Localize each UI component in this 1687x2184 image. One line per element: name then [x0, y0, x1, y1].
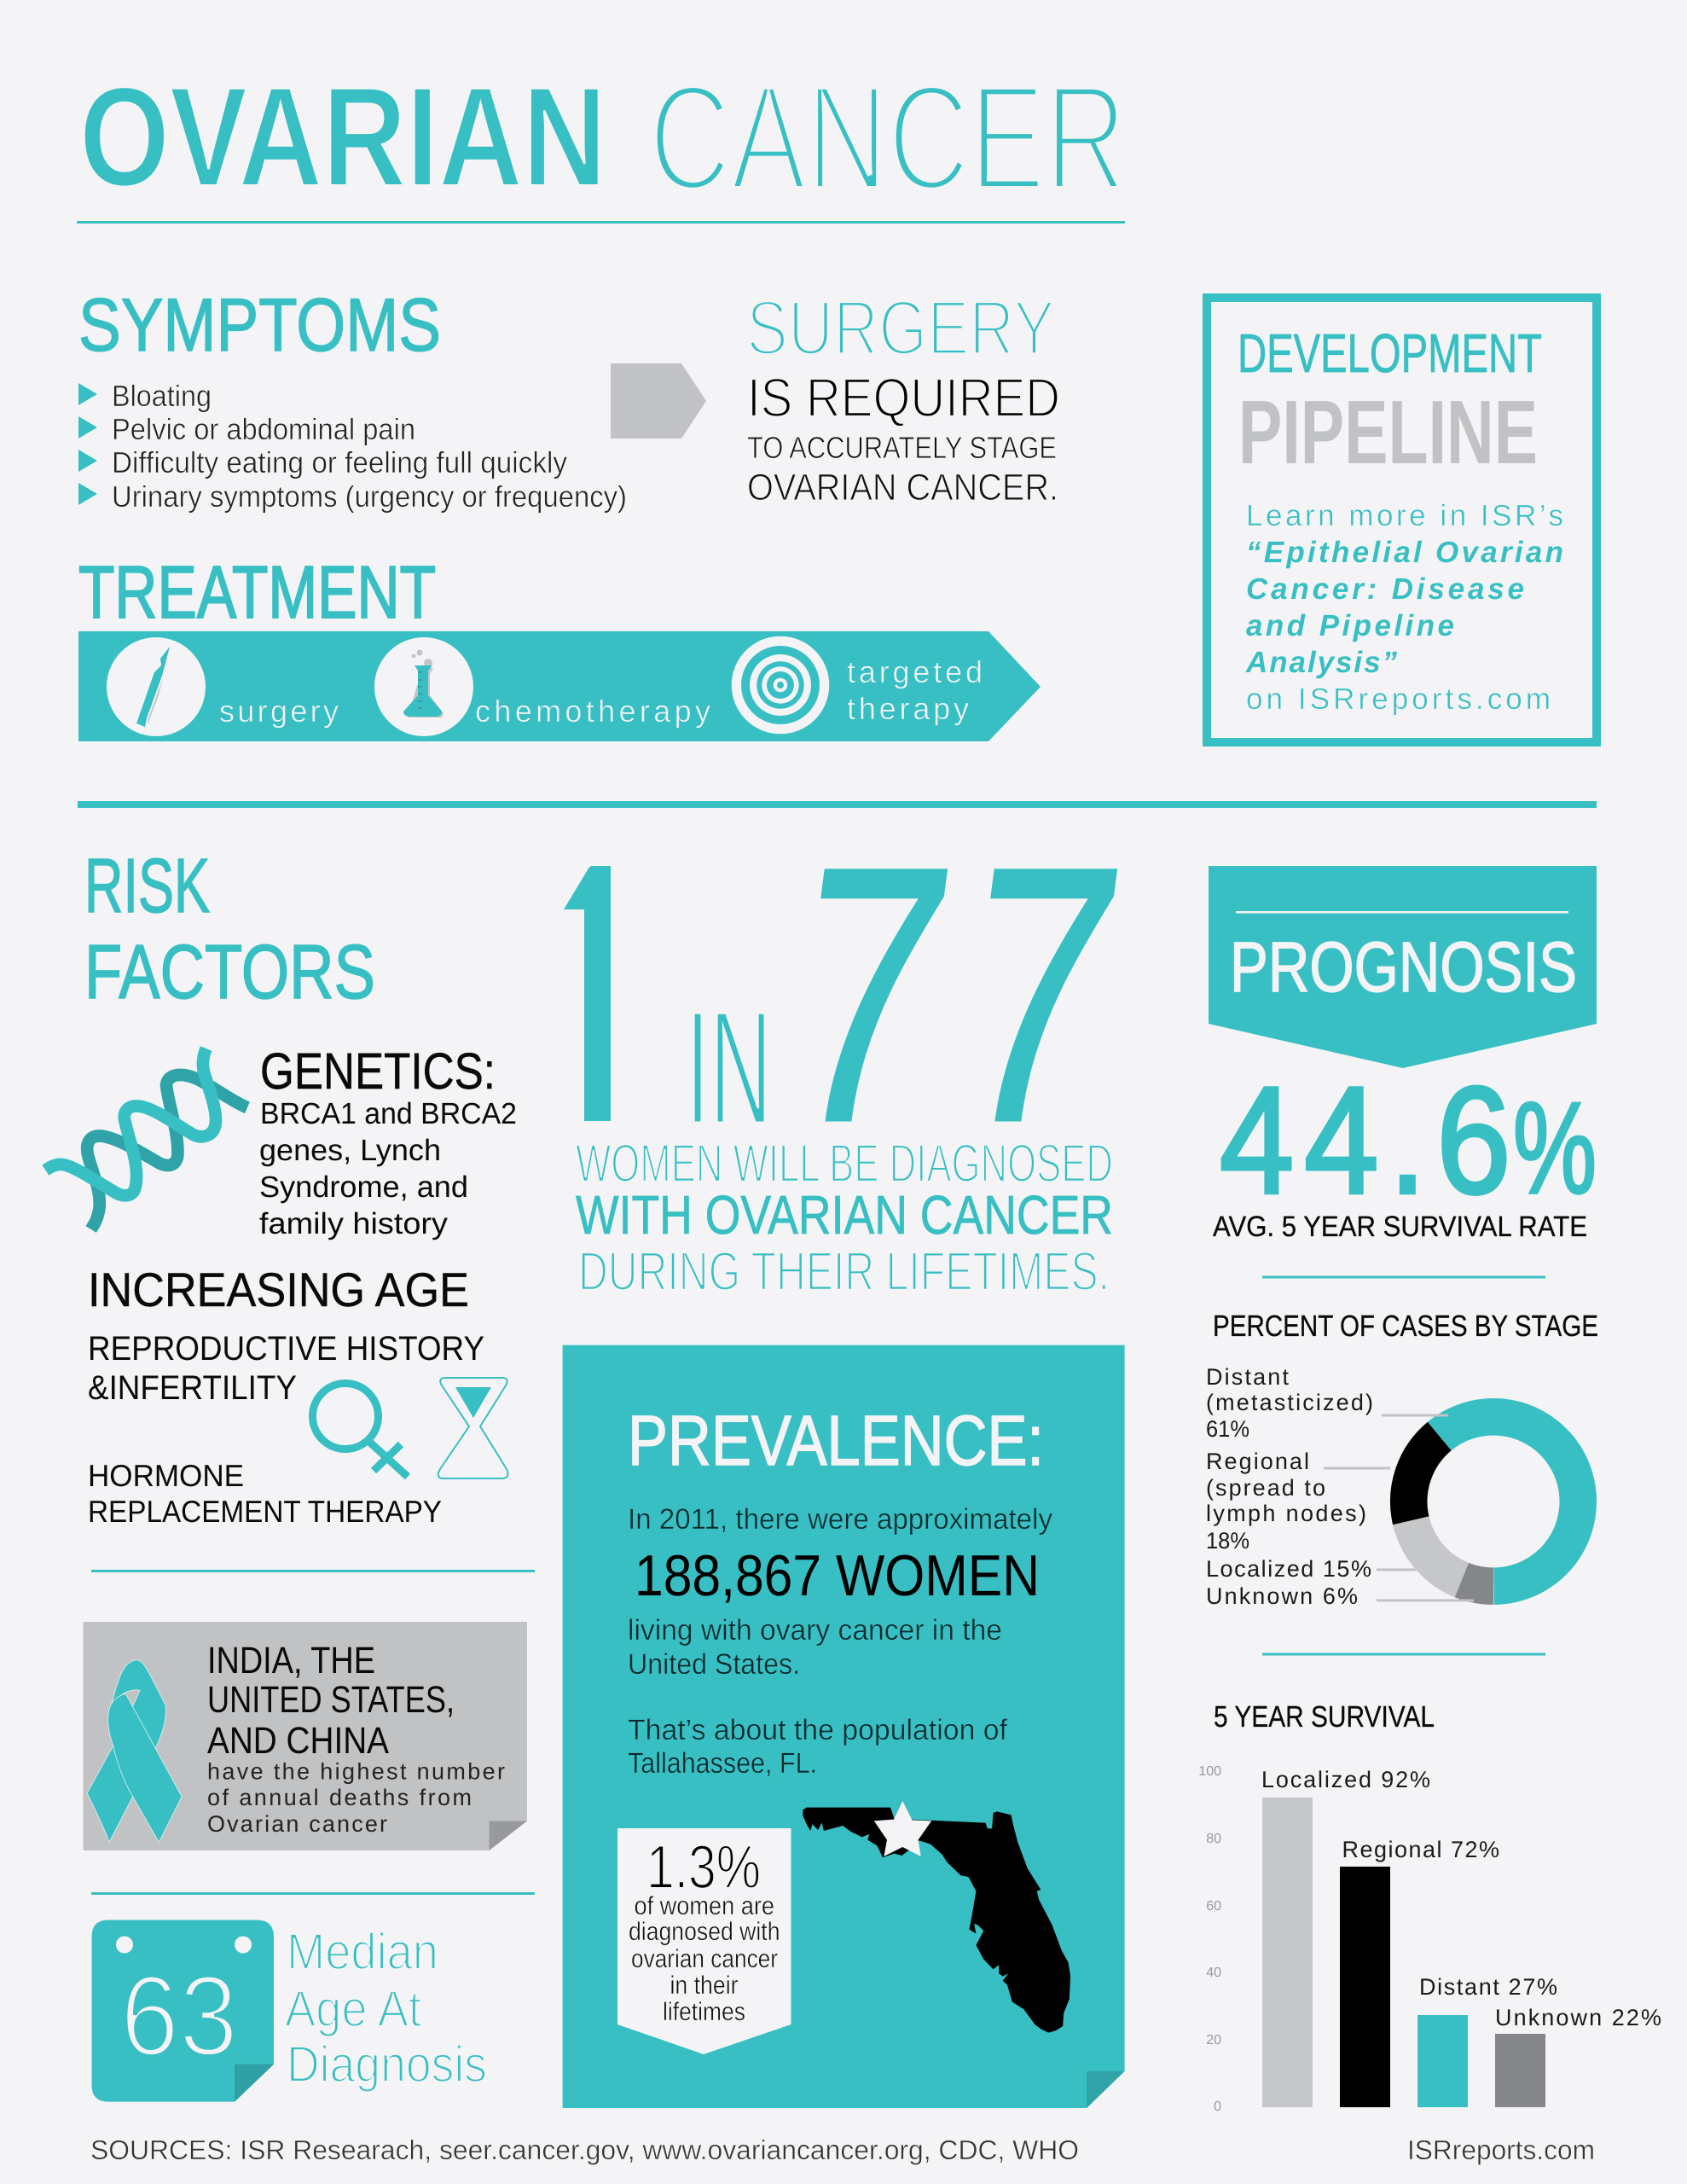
donut labels: Unknown 6% [1206, 1583, 1358, 1609]
genetics: genes, Lynch [259, 1134, 441, 1167]
big statistic: 1 in 77: 1 [511, 789, 674, 1199]
panel: treatment arrow [78, 631, 1041, 741]
statistic caption: WITH OVARIAN CANCER [576, 1184, 1113, 1246]
callout: 1.3%: in their [670, 1972, 739, 2000]
pipeline text: Learn more in ISR’s [1246, 499, 1563, 532]
heading: risk factors: RISK [84, 844, 210, 929]
prevalence body: In 2011, there were approximately [628, 1503, 1052, 1536]
treatment labels [219, 654, 983, 729]
note subtext: Ovarian cancer [207, 1811, 387, 1837]
symptoms list: Difficulty eating or feeling full quickly [112, 446, 567, 479]
y axis: 20 [1206, 2033, 1221, 2048]
statistic caption: WOMEN WILL BE DIAGNOSED [576, 1134, 1113, 1194]
donut labels: 61% [1206, 1416, 1249, 1442]
symptoms list: Urinary symptoms (urgency or frequency) [112, 480, 627, 514]
bars [1262, 1798, 1545, 2107]
donut labels: 18% [1206, 1528, 1249, 1554]
surgery callout: IS REQUIRED [747, 367, 1060, 428]
panel: prognosis banner [1209, 866, 1597, 1068]
panel: prognosis banner: PROGNOSIS [1230, 927, 1577, 1007]
donut labels: lymph nodes) [1206, 1501, 1366, 1526]
treatment labels: chemotherapy [475, 694, 710, 729]
footer sources: SOURCES: ISR Researach, seer.cancer.gov, www.ovariancancer.org, CDC, WHO [90, 2135, 1079, 2165]
icon: star [874, 1801, 931, 1856]
bar labels: Distant 27% [1419, 1974, 1557, 2000]
treatment labels: surgery [219, 694, 339, 729]
donut leader lines [1324, 1415, 1474, 1600]
genetics: Syndrome, and [259, 1170, 468, 1204]
footer site: ISRreports.com [1407, 2135, 1595, 2165]
icon: female symbol [312, 1384, 408, 1477]
bar labels: Localized 92% [1261, 1767, 1430, 1792]
arrow: grey [611, 363, 706, 439]
panel: development pipeline: DEVELOPMENT [1238, 322, 1542, 384]
fold [490, 1821, 527, 1850]
survival rate: AVG. 5 YEAR SURVIVAL RATE [1213, 1211, 1587, 1243]
prevalence body: United States. [628, 1648, 800, 1681]
surgery callout: TO ACCURATELY STAGE [747, 430, 1057, 465]
median age label [285, 1923, 487, 2093]
panel: development pipeline [1207, 298, 1597, 742]
donut chart [1374, 1382, 1613, 1621]
donut labels [1206, 1364, 1373, 1609]
icon: dna helix [45, 1048, 247, 1229]
big statistic: 1 in 77 [511, 789, 1140, 1199]
statistic caption [576, 1134, 1113, 1302]
reproductive history: REPRODUCTIVE HISTORY [88, 1330, 484, 1368]
hormone therapy: HORMONE [88, 1458, 244, 1493]
prevalence body: That’s about the population of [628, 1714, 1008, 1746]
fold [1087, 2071, 1125, 2108]
heading: risk factors [84, 844, 375, 1015]
statistic caption: DURING THEIR LIFETIMES. [578, 1240, 1110, 1302]
callout: 1.3%: ovarian cancer [631, 1945, 778, 1973]
panel: deaths note [84, 1622, 527, 1850]
y axis: 100 [1198, 1764, 1221, 1779]
median age label: Age At [285, 1980, 421, 2037]
icon: hourglass [438, 1378, 508, 1478]
bar labels [1261, 1767, 1661, 2030]
panel: prevalence [563, 1345, 1125, 2108]
genetics: GENETICS: [260, 1043, 496, 1100]
title: OVARIAN [79, 58, 606, 217]
y axis: 60 [1206, 1899, 1221, 1914]
bar labels: Regional 72% [1342, 1837, 1499, 1862]
heading: risk factors: FACTORS [84, 930, 375, 1015]
bullet icons [78, 383, 97, 505]
icon: calendar with median age [92, 1920, 274, 2102]
donut labels: (spread to [1206, 1475, 1325, 1501]
median age label: Diagnosis [287, 2036, 487, 2093]
prevalence body: Tallahassee, FL. [628, 1747, 817, 1780]
big statistic: 1 in 77: IN [686, 978, 772, 1159]
icon: calendar with median age: 63 [120, 1953, 238, 2080]
survival rate [1213, 1055, 1597, 1243]
y axis: 40 [1206, 1966, 1221, 1980]
survival rate: 44.6 [1220, 1055, 1510, 1225]
icon: ribbon [87, 1660, 182, 1842]
bar chart [1198, 1764, 1661, 2114]
surgery callout [746, 285, 1060, 508]
increasing age: INCREASING AGE [88, 1263, 469, 1316]
median age label: Median [287, 1923, 438, 1980]
donut labels: Localized 15% [1206, 1556, 1371, 1582]
prevalence heading: PREVALENCE: [628, 1401, 1044, 1480]
callout: 1.3%: of women are [635, 1892, 774, 1920]
prevalence body [628, 1503, 1052, 1780]
genetics: BRCA1 and BRCA2 [260, 1097, 517, 1130]
y axis [1198, 1764, 1221, 2114]
bar labels: Unknown 22% [1495, 2005, 1661, 2030]
genetics: family history [259, 1207, 449, 1240]
heading: treatment: TREATMENT [78, 551, 436, 634]
symptoms list [78, 380, 627, 514]
reproductive history: &INFERTILITY [88, 1369, 297, 1407]
reproductive history [88, 1330, 484, 1407]
icon: scalpel [107, 637, 206, 736]
note subtext: of annual deaths from [207, 1785, 472, 1810]
note subtext [207, 1759, 505, 1837]
treatment labels: targeted [847, 654, 983, 689]
big statistic: 1 in 77: 7 [938, 792, 1140, 1198]
note text [207, 1640, 455, 1762]
title: CANCER [649, 55, 1127, 222]
callout: 1.3%: lifetimes [663, 1998, 745, 2026]
note text: INDIA, THE [207, 1640, 375, 1682]
callout: 1.3%: 1.3% [646, 1833, 761, 1902]
donut labels: Distant [1206, 1364, 1289, 1390]
treatment labels: therapy [847, 691, 969, 726]
title [79, 55, 1127, 222]
y axis: 80 [1206, 1832, 1221, 1846]
pipeline text: Analysis” [1245, 646, 1397, 679]
map: florida [803, 1801, 1070, 2033]
pipeline text: and Pipeline [1246, 609, 1454, 642]
big statistic: 1 in 77: 7 [768, 792, 971, 1198]
icon: flask [374, 637, 473, 736]
genetics [259, 1043, 517, 1240]
hormone therapy: REPLACEMENT THERAPY [88, 1494, 442, 1529]
pipeline text [1245, 499, 1563, 716]
pipeline text: “Epithelial Ovarian [1246, 536, 1563, 569]
survival rate: % [1513, 1076, 1597, 1221]
heading: 5 year survival: 5 YEAR SURVIVAL [1214, 1700, 1435, 1734]
panel: development pipeline: PIPELINE [1238, 382, 1538, 483]
hormone therapy [88, 1458, 442, 1529]
donut labels: Regional [1206, 1449, 1309, 1474]
donut labels: (metasticized) [1206, 1390, 1373, 1415]
callout: 1.3%: diagnosed with [629, 1918, 780, 1946]
surgery callout: OVARIAN CANCER. [747, 467, 1058, 508]
symptoms list: Bloating [112, 380, 212, 413]
callout: 1.3% [617, 1828, 791, 2054]
icon: target [732, 636, 829, 734]
heading: symptoms: SYMPTOMS [78, 282, 441, 367]
188,867 women: 188,867 WOMEN [635, 1543, 1040, 1608]
pipeline text: Cancer: Disease [1246, 572, 1524, 606]
prevalence body: living with ovary cancer in the [628, 1614, 1002, 1647]
note text: AND CHINA [207, 1720, 390, 1762]
note text: UNITED STATES, [207, 1679, 455, 1721]
symptoms list: Pelvic or abdominal pain [112, 413, 415, 446]
note subtext: have the highest number [207, 1759, 505, 1785]
surgery callout: SURGERY [746, 285, 1055, 372]
pipeline text: on ISRreports.com [1246, 682, 1551, 716]
y axis: 0 [1214, 2100, 1221, 2114]
heading: percent of cases by stage: PERCENT OF CASES BY STAGE [1213, 1310, 1598, 1343]
